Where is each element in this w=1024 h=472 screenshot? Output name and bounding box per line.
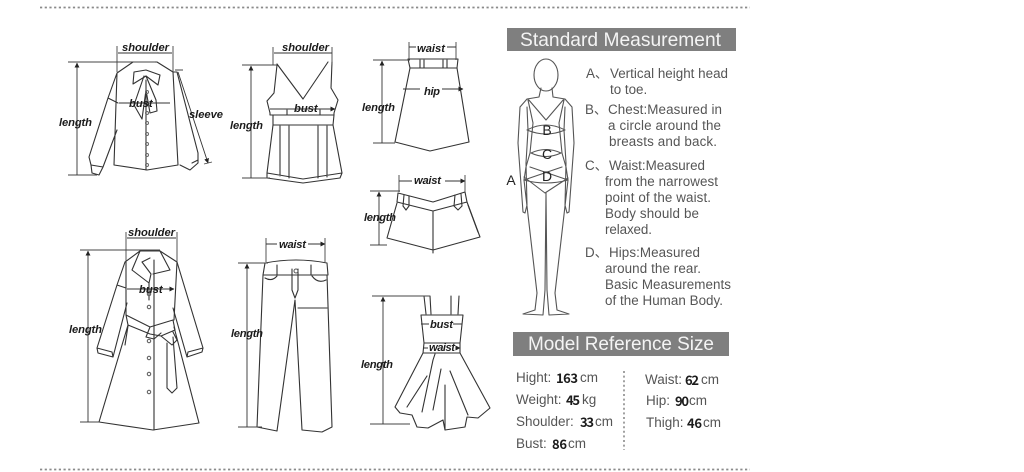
model sizes: right column: cm (703, 415, 721, 430)
model sizes: left column: Hight: (516, 370, 551, 385)
text block: B chest (585, 102, 722, 149)
garment: long coat with measurements: bust (139, 284, 164, 296)
model sizes: left column: 163 (556, 368, 578, 387)
body figure diagram with A B C D markers: D (542, 168, 552, 184)
text block: C waist: from the narrowest (605, 174, 718, 189)
garment: long coat with measurements: shoulder (128, 227, 176, 239)
garment: blouse with measurements (59, 42, 223, 175)
model sizes: right column: 46 (687, 413, 702, 432)
garment: long coat with measurements (69, 227, 203, 430)
model sizes: left column: 45 (566, 390, 580, 409)
model sizes: left column: Bust: (516, 436, 547, 451)
garment: blouse with measurements: sleeve (189, 109, 223, 121)
text block: A vertical height: to toe. (610, 82, 647, 97)
model sizes: left column (516, 368, 613, 453)
model sizes: right column: Hip: (646, 393, 670, 408)
garment: shorts with measurements: length (364, 212, 396, 224)
model sizes: right column: cm (701, 372, 719, 387)
body figure diagram with A B C D markers: B (542, 122, 552, 138)
text block: C waist (585, 158, 718, 237)
garment: shorts with measurements: waist (414, 175, 442, 187)
text block: D hips: of the Human Body. (605, 293, 723, 308)
text block: B chest: B、 (585, 102, 607, 117)
garment: skirt with measurements: length (362, 102, 395, 114)
text block: B chest: breasts and back. (609, 134, 717, 149)
heading: Model Reference Size: Model Reference Size (528, 334, 714, 355)
model sizes: right column: cm (689, 393, 707, 408)
model sizes: right column (645, 370, 721, 432)
garment: blouse with measurements: shoulder (122, 42, 170, 54)
garment: trousers with measurements (231, 238, 332, 432)
garment: vest top with measurements: shoulder (282, 42, 330, 54)
model sizes: left column: Shoulder: (516, 414, 574, 429)
text block: A vertical height (586, 66, 728, 97)
body figure diagram with A B C D markers (506, 59, 574, 315)
text block: D hips: Basic Measurements (605, 277, 731, 292)
garment: sleeveless dress with measurements (361, 296, 490, 430)
model sizes: left column: kg (582, 392, 596, 407)
model sizes: right column: 90 (675, 391, 689, 410)
garment: sleeveless dress with measurements: waist (429, 342, 456, 354)
text block: C waist: Body should be (605, 206, 699, 221)
text block: B chest: Chest:Measured in (608, 102, 722, 117)
garment: vest top with measurements: bust (294, 103, 319, 115)
garment: blouse with measurements: length (59, 117, 92, 129)
text block: C waist: point of the waist. (605, 190, 711, 205)
garment: sleeveless dress with measurements: bust (430, 319, 454, 331)
body figure diagram with A B C D markers: A (506, 172, 516, 188)
model sizes: left column: 33 (580, 412, 594, 431)
garment: skirt with measurements (362, 42, 469, 151)
text block: D hips: D、 (585, 245, 608, 260)
garment: vest top with measurements (230, 42, 342, 183)
text block: C waist: Waist:Measured (609, 158, 705, 173)
garment: trousers with measurements: waist (279, 239, 307, 251)
text block: D hips: around the rear. (605, 261, 701, 276)
body figure diagram with A B C D markers: C (542, 146, 552, 162)
model sizes: right column: 62 (685, 370, 699, 389)
garment: trousers with measurements: length (231, 328, 263, 340)
garment: blouse with measurements: bust (129, 98, 154, 110)
text block: B chest: a circle around the (608, 118, 721, 133)
garment: vest top with measurements: length (230, 120, 263, 132)
heading: Standard Measurement: Standard Measurement (520, 30, 722, 51)
model sizes: left column: cm (580, 370, 598, 385)
garment: skirt with measurements: waist (417, 43, 446, 55)
garment: shorts with measurements (364, 175, 480, 253)
model sizes: left column: Weight: (516, 392, 562, 407)
text block: C waist: relaxed. (605, 222, 652, 237)
text block: A vertical height: A、 (586, 66, 608, 81)
text block: D hips (585, 245, 731, 308)
garment: skirt with measurements: hip (424, 86, 440, 98)
text block: D hips: Hips:Measured (609, 245, 700, 260)
model sizes: right column: Waist: (645, 372, 682, 387)
garment: long coat with measurements: length (69, 324, 102, 336)
model sizes: left column: 86 (552, 434, 567, 453)
text block: A vertical height: Vertical height head (610, 66, 728, 81)
model sizes: left column: cm (595, 414, 613, 429)
text block: C waist: C、 (585, 158, 608, 173)
model sizes: left column: cm (568, 436, 586, 451)
model sizes: right column: Thigh: (646, 415, 684, 430)
garment: sleeveless dress with measurements: length (361, 359, 393, 371)
